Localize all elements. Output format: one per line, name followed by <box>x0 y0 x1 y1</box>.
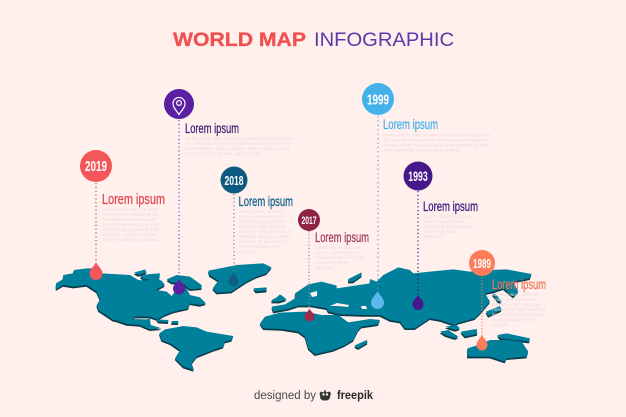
marker: 2018: Lorem ipsum <box>238 194 293 209</box>
marker: 1993: Lorem ipsum dolor sit <box>424 214 470 219</box>
title <box>173 30 454 51</box>
marker: 2019: dolore magna aliquam erat <box>102 227 159 232</box>
marker: 2018: magna aliquam erat <box>239 234 290 239</box>
marker: 2018: minim veniam, quis <box>239 244 282 249</box>
marker: 2019: 2019 <box>85 158 107 175</box>
marker: location icon: Lorem ipsum dolor sit amet, consectetuer adipiscing <box>185 136 293 141</box>
marker: 2017: amet, consectetuer <box>315 250 360 255</box>
marker: 1999: Lorem ipsum <box>383 117 438 132</box>
marker: 2017: euismod <box>315 265 334 270</box>
marker: 1993: 1993 <box>408 169 428 184</box>
marker: 2017: adipiscing elit, sed diam <box>315 255 364 260</box>
marker: 1993 <box>404 162 478 310</box>
marker: 1989 <box>469 250 546 351</box>
marker: 2017: Lorem ipsum dolor sit <box>315 245 361 250</box>
marker: 2018: volutpat. Ut wisi enim ad <box>239 239 290 244</box>
marker: location icon: Lorem ipsum <box>185 121 239 136</box>
marker: location icon: elit, sed diam nonummy nibh euismod tincidunt ut <box>185 141 291 146</box>
marker: 2019: minim veniam, quis nostrud <box>102 237 160 242</box>
marker: 2018: adipiscing elit, sed diam <box>239 219 286 224</box>
marker: 2019: sed diam nonummy nibh <box>102 217 158 222</box>
marker: 2018: tincidunt ut laoreet dolore <box>239 229 293 234</box>
marker: 2018: Lorem ipsum dolor sit <box>239 209 284 214</box>
marker: 1999: laoreet dolore magna aliquam erat volutpat. Ut wisi <box>384 142 488 148</box>
marker: 1999 <box>362 83 491 309</box>
marker: 2018: nostrud <box>239 249 256 254</box>
icon: freepik logo <box>320 390 331 400</box>
marker: 2019: Lorem ipsum dolor sit amet, <box>102 207 159 212</box>
marker: 1989: 1989 <box>473 256 491 271</box>
marker: 1993: amet, consectetuer <box>424 219 465 224</box>
marker: 1989: Lorem ipsum dolor sit <box>492 292 539 297</box>
marker: 1989: tincidunt ut laoreet dolore <box>492 312 546 317</box>
marker: 1989: Lorem ipsum <box>492 277 546 292</box>
marker: 1989: adipiscing elit, sed diam <box>492 302 541 307</box>
marker: location icon <box>164 89 293 294</box>
marker: 1993: euismod <box>424 234 443 239</box>
marker: location icon: enim ad minim veniam, quis nostrud <box>185 151 262 156</box>
marker: 1993: adipiscing elit, sed diam <box>424 224 473 229</box>
marker: 1989: amet, consectetuer <box>492 297 537 302</box>
marker: 2017: 2017 <box>302 215 316 227</box>
marker: 2018: amet, consectetuer <box>239 214 284 219</box>
footer credit: designed by <box>254 390 316 402</box>
marker: 2019: volutpat. Ut wisi enim ad <box>102 232 158 237</box>
marker: 1989: volutpat. <box>492 322 508 327</box>
marker: 2018: 2018 <box>224 173 244 188</box>
marker: 2019: consectetuer adipiscing elit, <box>102 212 159 217</box>
marker: 1999: enim ad minim veniam, quis nostrud <box>384 148 460 152</box>
marker: location icon: laoreet dolore magna aliquam erat volutpat. Ut wisi <box>185 146 289 151</box>
marker: 2019: euismod tincidunt ut laoreet <box>102 222 160 227</box>
marker: 2019: Lorem ipsum <box>102 192 165 208</box>
marker: 1989: magna aliquam erat <box>492 317 535 322</box>
world map <box>56 263 532 372</box>
marker: 2017 <box>298 209 369 322</box>
marker: 2017: nonummy nibh <box>315 260 349 265</box>
title: WORLD MAP <box>173 30 306 51</box>
marker: 2018: nonummy nibh euismod <box>239 224 286 229</box>
marker: 1993: nonummy nibh <box>424 229 457 234</box>
icon: location pin <box>173 98 185 114</box>
marker: 1999: Lorem ipsum dolor sit amet, consectetuer adipiscing <box>384 132 491 138</box>
marker: 2019 <box>80 150 165 280</box>
marker: 1999: 1999 <box>367 92 389 108</box>
footer credit <box>254 390 374 402</box>
title: INFOGRAPHIC <box>314 30 454 51</box>
marker: 1993: Lorem ipsum <box>423 199 478 214</box>
marker: 1989: nonummy nibh euismod <box>492 307 546 312</box>
marker: 2018 <box>220 166 293 286</box>
marker: 2017: Lorem ipsum <box>315 230 369 245</box>
marker: 1999: elit, sed diam nonummy nibh euismod tincidunt ut <box>384 138 489 142</box>
footer credit: freepik <box>337 390 374 402</box>
